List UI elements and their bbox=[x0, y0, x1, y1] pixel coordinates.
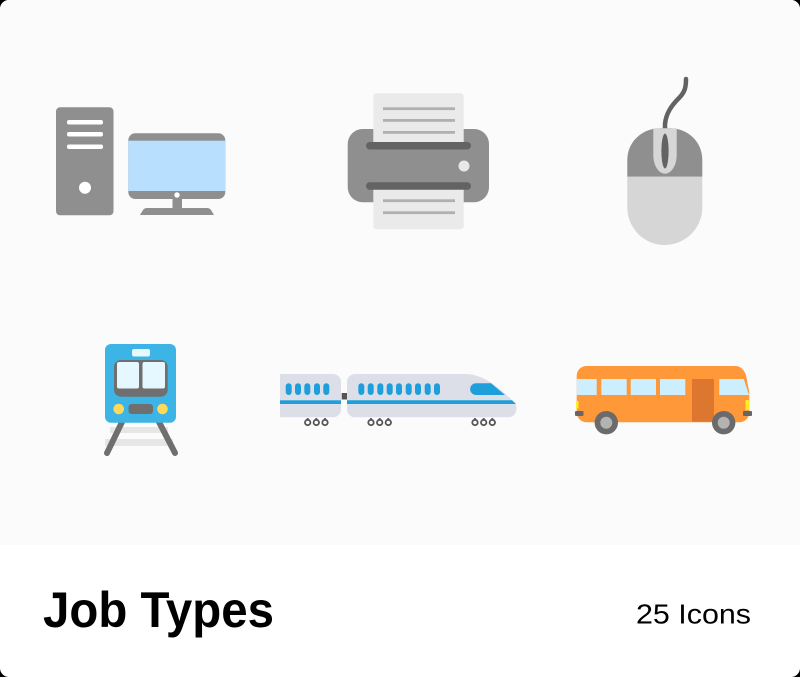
icon: desktop computer bbox=[56, 107, 225, 215]
icon: computer mouse bbox=[627, 79, 702, 245]
icon count: 25 Icons bbox=[636, 598, 751, 630]
title: Job Types bbox=[43, 582, 274, 638]
icon: front view train bbox=[105, 344, 176, 453]
icon: orange bus bbox=[575, 366, 752, 434]
icon: bullet train bbox=[280, 374, 517, 425]
icon: printer bbox=[348, 93, 489, 229]
